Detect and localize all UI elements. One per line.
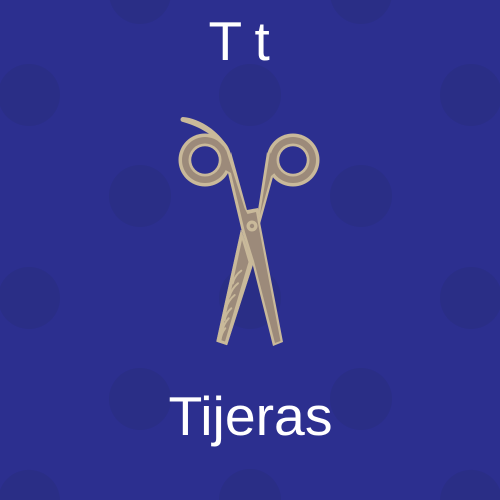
thread curl [181, 117, 229, 150]
word label: Tijeras [168, 385, 332, 447]
title: letter pair: t [254, 10, 270, 72]
icon: scissors [178, 117, 320, 346]
lower-left serrated blade [216, 230, 253, 345]
title: letter pair: T [208, 10, 242, 72]
pivot screw [246, 220, 258, 232]
right finger ring and arm [258, 134, 320, 224]
left finger ring, arm and long blade [178, 134, 283, 346]
